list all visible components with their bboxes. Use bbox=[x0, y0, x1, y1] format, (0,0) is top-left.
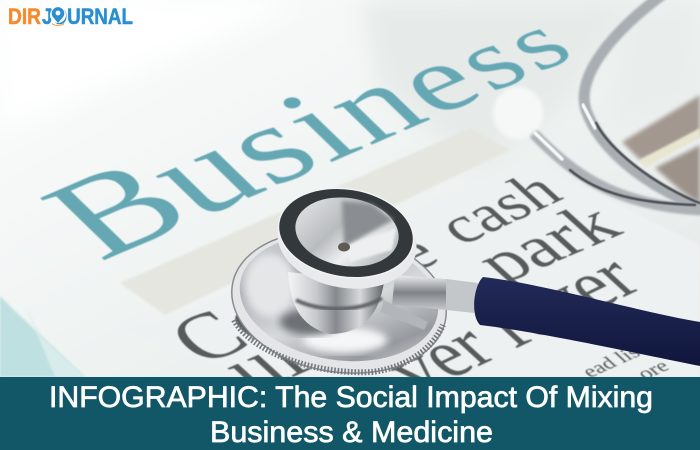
logo: DirJournal: JOURNAL bbox=[42, 4, 133, 29]
article text: ead list bbox=[577, 340, 651, 381]
reflection wedge inside the bell bbox=[342, 201, 394, 247]
article text: cash bbox=[421, 161, 575, 255]
article text: ult bbox=[200, 310, 347, 406]
article text: Co bbox=[149, 278, 304, 378]
article text: park bbox=[458, 190, 637, 294]
icon: navy stethoscope tube bbox=[474, 277, 700, 366]
article text bbox=[177, 178, 670, 377]
icon: stethoscope tubing bbox=[493, 0, 700, 210]
article text: ver fever bbox=[365, 239, 657, 407]
logo: DirJournal: DIR bbox=[8, 4, 41, 29]
title text bbox=[49, 381, 653, 449]
title text: Business & Medicine bbox=[210, 416, 493, 449]
icon: stethoscope chestpiece bbox=[231, 188, 478, 376]
article text: ore bbox=[632, 356, 674, 383]
knurled edge of the disc bbox=[234, 320, 443, 372]
masthead word Business: Business bbox=[13, 0, 599, 283]
icon: map pin in logo bbox=[50, 7, 66, 25]
title text: INFOGRAPHIC: The Social Impact Of Mixing bbox=[49, 381, 653, 414]
logo: DirJournal bbox=[8, 4, 133, 29]
title banner bbox=[0, 377, 700, 450]
pipe joint bbox=[446, 279, 478, 313]
article text: e bbox=[375, 223, 452, 281]
